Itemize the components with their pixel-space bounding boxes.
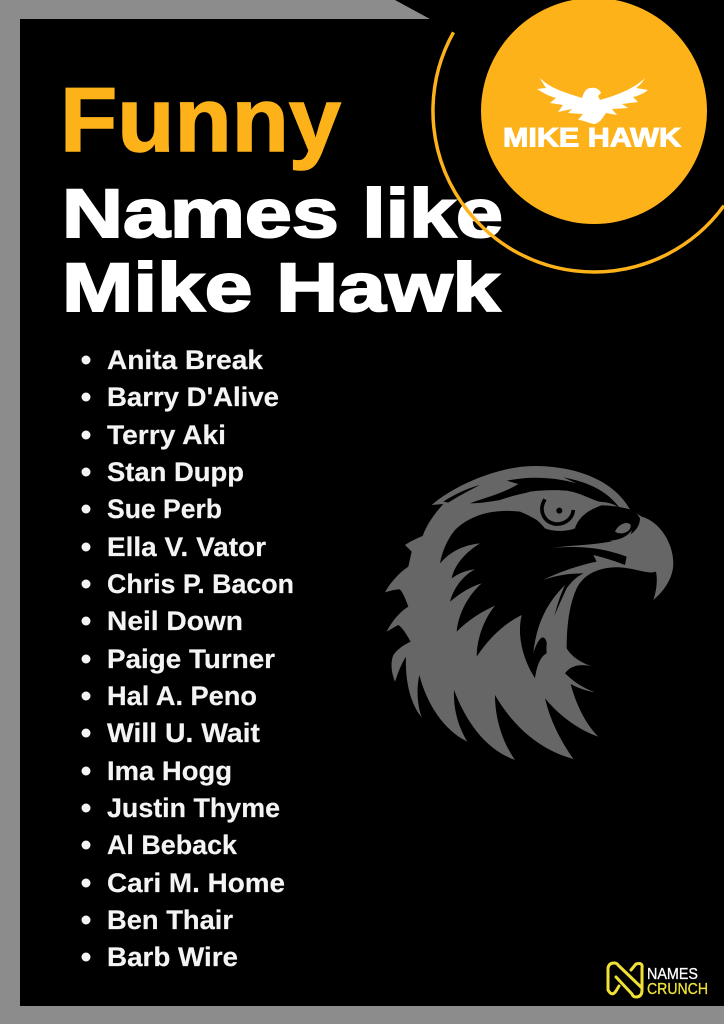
list of funny names: Chris P. Bacon [107,569,294,599]
eagle brow band [470,477,620,508]
list of funny names: Justin Thyme [107,793,280,823]
title: Names like Mike Hawk: Names like [62,175,503,252]
eagle neck slit [443,485,480,503]
logo text: CRUNCH: CRUNCH [647,981,708,998]
eagle throat feather [533,585,565,653]
list of funny names: Hal A. Peno [107,681,257,711]
eagle face shadow [440,505,640,678]
title: Names like Mike Hawk: Mike Hawk [62,249,501,326]
list of funny names: Anita Break [107,345,264,375]
list of funny names: Paige Turner [107,644,276,674]
list of funny names [82,345,294,972]
icon: yellow N mark [608,963,642,997]
orange ring arc [433,32,724,272]
list of funny names: Barry D'Alive [107,382,279,412]
orange logo circle [481,0,707,224]
eagle nostril [610,523,632,542]
list of funny names: Barb Wire [107,942,238,972]
list of funny names: Terry Aki [107,420,226,450]
logo text: MIKE HAWK: MIKE HAWK [503,122,682,152]
list of funny names: Will U. Wait [107,718,260,748]
footer logo [608,963,708,998]
logo text: NAMES: NAMES [647,966,698,983]
list of funny names: Neil Down [107,606,243,636]
title: Funny: Funny [60,70,341,171]
list of funny names: Ben Thair [107,905,233,935]
list of funny names: Stan Dupp [107,457,244,487]
title: Names like Mike Hawk [62,175,503,326]
list of funny names: Sue Perb [107,494,222,524]
list of funny names: Cari M. Home [107,868,285,898]
list of funny names: Al Beback [107,830,238,860]
bullets [82,356,90,962]
list of funny names: Ima Hogg [107,756,232,786]
eagle eye [500,490,607,531]
icon: gray eagle head [385,466,673,760]
icon: white eagle with spread wings [537,78,648,124]
list of funny names: Ella V. Vator [107,532,267,562]
